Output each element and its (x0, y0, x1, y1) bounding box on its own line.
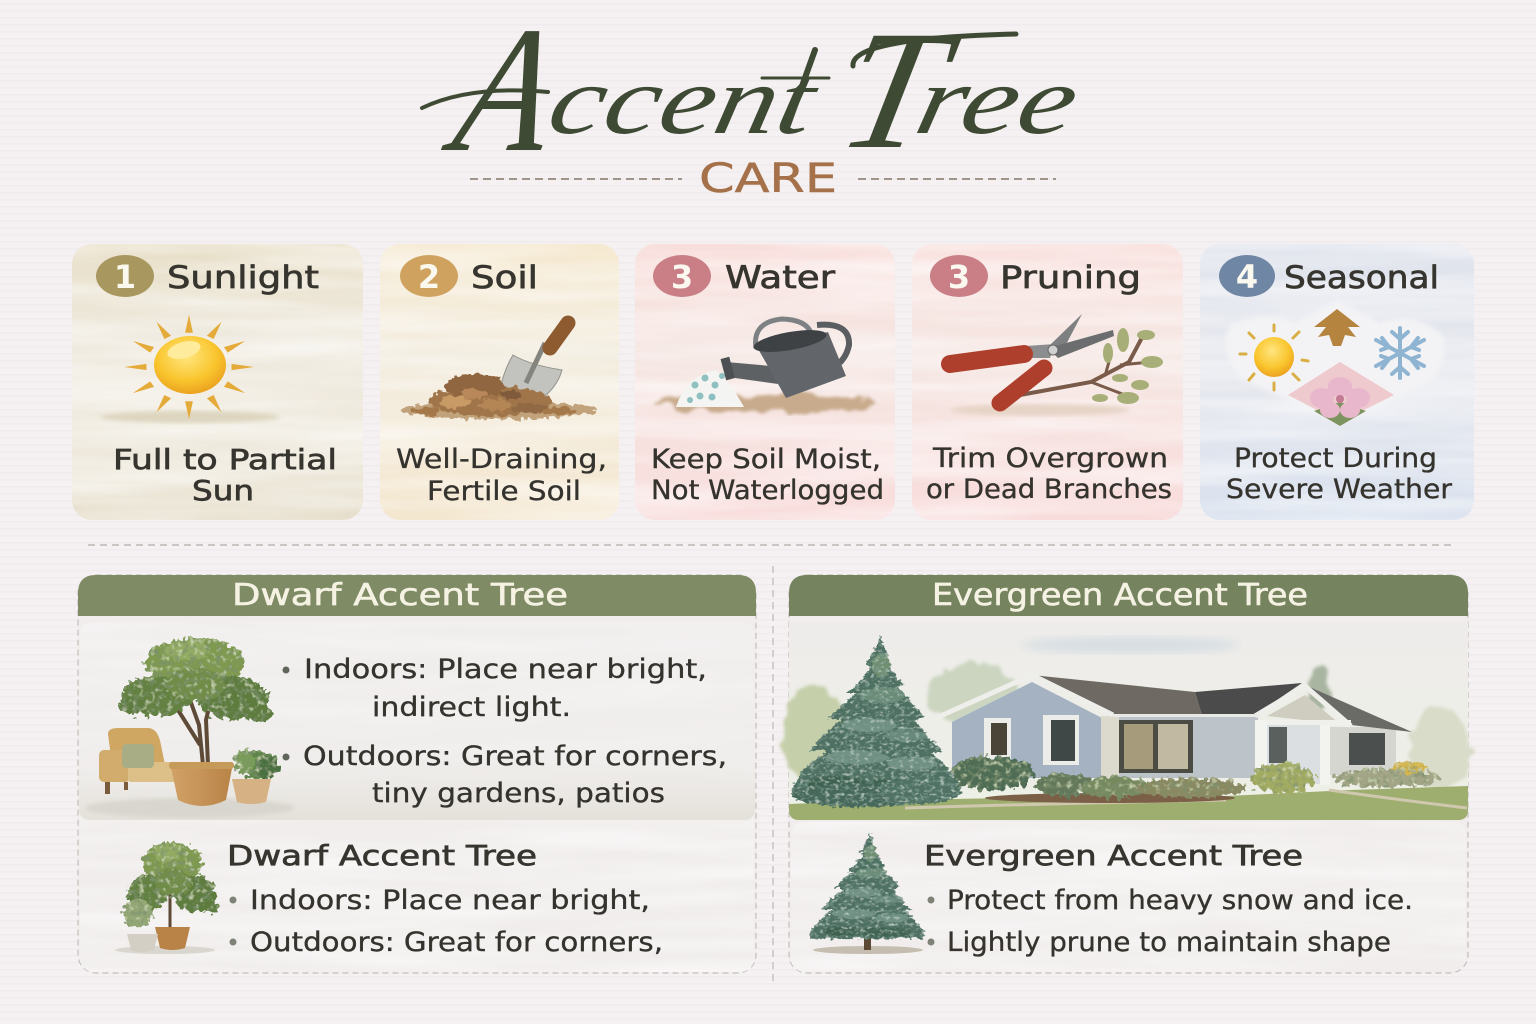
badge: 4: 4 (1236, 258, 1258, 296)
text: keep soil moist: Keep Soil Moist, (651, 444, 881, 475)
panel: seasonal (1200, 244, 1474, 520)
evergreen tree (792, 635, 962, 807)
header: evergreen accent tree: Evergreen Accent Tree (932, 578, 1308, 613)
heading: sunlight: Sunlight (167, 260, 319, 296)
sun (1240, 325, 1308, 390)
text: keep soil moist: Not Waterlogged (651, 475, 884, 506)
illustration: potted tree with armchair (99, 638, 278, 806)
title: T (784, 0, 971, 185)
panel: soil (380, 244, 619, 520)
title (422, 0, 1100, 190)
armchair (99, 728, 190, 794)
text: dwarf accent tree details: Outdoors: Great for corners, (250, 927, 663, 958)
text: full to partial sun: Full to Partial (113, 443, 337, 476)
text: protect during severe weather: Protect During (1234, 443, 1437, 474)
icon: trowel in soil (402, 323, 598, 419)
panel: pruning (912, 244, 1183, 520)
windows (984, 718, 1011, 765)
badge: 3: 3 (671, 258, 693, 296)
illustration: house with evergreen (783, 622, 1470, 820)
icon: pruning shears and branch (950, 314, 1163, 416)
text: trim overgrown: Trim Overgrown (932, 443, 1168, 474)
panel: dwarf accent tree (78, 575, 756, 973)
badge: 3 (653, 255, 711, 297)
text: full to partial sun (113, 443, 337, 507)
small plant (235, 750, 278, 780)
large pot (170, 763, 233, 806)
header: evergreen accent tree (789, 575, 1468, 616)
text: dwarf accent tree details: Dwarf Accent Tree (227, 839, 537, 872)
subtitle: care: CARE (699, 156, 837, 202)
heading: pruning: Pruning (1000, 260, 1141, 296)
text: indoors and outdoors (282, 654, 727, 809)
illustration: small potted tree (115, 842, 219, 954)
header: dwarf accent tree: Dwarf Accent Tree (232, 578, 568, 613)
title: ree (907, 47, 1088, 155)
icon: sun (100, 315, 280, 423)
heading: seasonal: Seasonal (1284, 260, 1439, 296)
panel: water (635, 244, 895, 520)
text: keep soil moist (651, 444, 884, 506)
text: well-draining fertile soil (396, 444, 607, 507)
heading: water: Water (725, 260, 835, 296)
text: evergreen accent tree details (924, 839, 1413, 958)
text: evergreen accent tree details: Evergreen Accent Tree (924, 839, 1303, 872)
text: evergreen accent tree details: Protect from heavy snow and ice. (947, 885, 1413, 916)
text: dwarf accent tree details: Indoors: Place near bright, (250, 885, 650, 916)
badge: 3: 3 (948, 258, 970, 296)
badge: 4 (1219, 255, 1275, 297)
panel: sunlight (72, 244, 363, 520)
header: dwarf accent tree (78, 575, 756, 616)
text: trim overgrown: or Dead Branches (926, 474, 1172, 505)
foliage (119, 638, 273, 722)
text: well-draining fertile soil: Fertile Soil (427, 476, 581, 507)
text: indoors and outdoors: tiny gardens, patios (372, 778, 665, 809)
trunk (178, 695, 212, 765)
text: evergreen accent tree details: Lightly prune to maintain shape (947, 927, 1391, 958)
shrubs (950, 756, 1442, 798)
background trees (783, 663, 1470, 792)
icon: four seasons (1225, 300, 1445, 426)
badge: 2 (400, 255, 458, 297)
icon: watering can (657, 319, 873, 412)
badge: 2: 2 (418, 258, 440, 296)
badge: 1: 1 (114, 258, 136, 296)
leaf (1314, 309, 1360, 346)
illustration: small evergreen tree (810, 833, 925, 954)
flower (1288, 362, 1394, 426)
text: well-draining fertile soil: Well-Draining, (396, 444, 607, 475)
badge: 3 (930, 255, 988, 297)
text: trim overgrown (926, 443, 1172, 505)
text: protect during severe weather (1226, 443, 1453, 505)
house (936, 675, 1412, 785)
text: indoors and outdoors: indirect light. (372, 692, 571, 723)
badge: 1 (96, 255, 154, 297)
text: protect during severe weather: Severe Weather (1226, 474, 1453, 505)
text: full to partial sun: Sun (192, 474, 254, 507)
title: ccent (540, 47, 828, 155)
grass and path (789, 786, 1468, 820)
snowflake (1376, 328, 1424, 378)
heading: soil: Soil (471, 260, 538, 296)
text: indoors and outdoors: Indoors: Place near bright, (304, 654, 707, 685)
text: dwarf accent tree details (227, 839, 663, 958)
panel: evergreen accent tree (783, 575, 1470, 973)
text: indoors and outdoors: Outdoors: Great for corners, (303, 741, 727, 772)
